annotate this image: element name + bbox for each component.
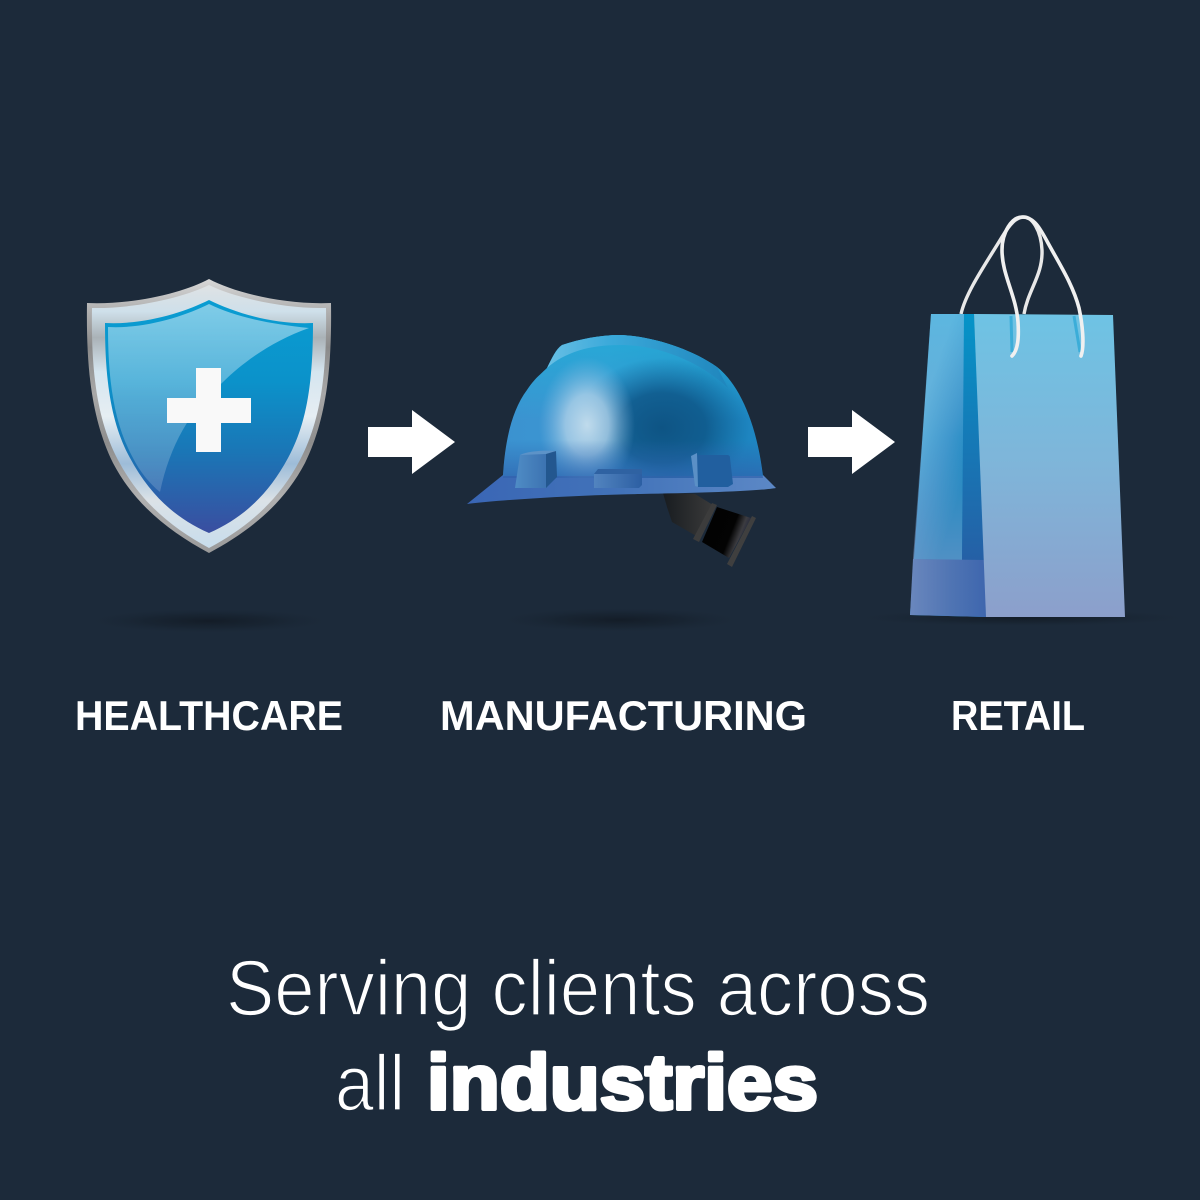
arrow: manufacturing to retail bbox=[808, 410, 895, 474]
bag base fold bbox=[910, 559, 986, 617]
floor shadow: helmet bbox=[490, 607, 750, 633]
shield outer rim bbox=[87, 279, 331, 553]
arrow: healthcare to manufacturing bbox=[368, 410, 455, 474]
front handle bbox=[1002, 217, 1083, 356]
icon: retail shopping bag bbox=[910, 217, 1125, 617]
dark dome shadow bbox=[604, 364, 740, 478]
top ridge bbox=[547, 335, 728, 388]
label: healthcare: HEALTHCARE bbox=[75, 692, 343, 739]
buckle flange bbox=[727, 516, 756, 567]
centre tab body bbox=[594, 474, 642, 488]
label: retail: RETAIL bbox=[951, 692, 1085, 739]
right tab bbox=[691, 453, 733, 487]
lower dome tone bbox=[503, 444, 763, 478]
bag front panel bbox=[974, 314, 1125, 617]
shield blue face bbox=[105, 300, 313, 533]
floor shadow: bag bbox=[842, 609, 1200, 627]
shield inner rim bbox=[92, 285, 326, 548]
right tab body bbox=[697, 455, 733, 487]
top cap tone bbox=[520, 335, 742, 402]
inner fold strip bbox=[962, 314, 985, 560]
icon: healthcare shield bbox=[87, 279, 331, 553]
side panel sheen bbox=[913, 314, 964, 560]
right tab edge bbox=[691, 453, 698, 487]
infographic canvas bbox=[78, 215, 1125, 1112]
left tab top bbox=[520, 451, 556, 455]
centre tab top bbox=[594, 469, 642, 474]
shield gloss bbox=[108, 304, 309, 492]
left tab side bbox=[546, 451, 557, 488]
left tab bbox=[515, 451, 557, 488]
helmet brim bbox=[467, 475, 776, 504]
floor shadow: shield bbox=[79, 608, 339, 634]
left tab front bbox=[515, 453, 550, 488]
strap collar bbox=[693, 503, 717, 542]
strap buckle bbox=[702, 507, 751, 558]
headline word: industries: industries bbox=[427, 1038, 818, 1126]
bag side panel bbox=[910, 314, 986, 617]
centre tab bbox=[594, 469, 642, 488]
headline line 1: Serving clients across bbox=[226, 943, 930, 1032]
headline word: all: all bbox=[335, 1038, 405, 1127]
back handle bbox=[961, 217, 1042, 314]
chin strap bbox=[663, 493, 713, 537]
helmet dome bbox=[503, 335, 763, 476]
headline line 2 bbox=[335, 1038, 818, 1127]
icon: manufacturing hard hat bbox=[467, 335, 776, 567]
icon: medical cross bbox=[167, 368, 251, 452]
helmet shading bbox=[500, 335, 770, 480]
handle hole marks bbox=[1011, 316, 1080, 352]
label: manufacturing: MANUFACTURING bbox=[440, 692, 807, 739]
dome highlight bbox=[542, 362, 632, 478]
